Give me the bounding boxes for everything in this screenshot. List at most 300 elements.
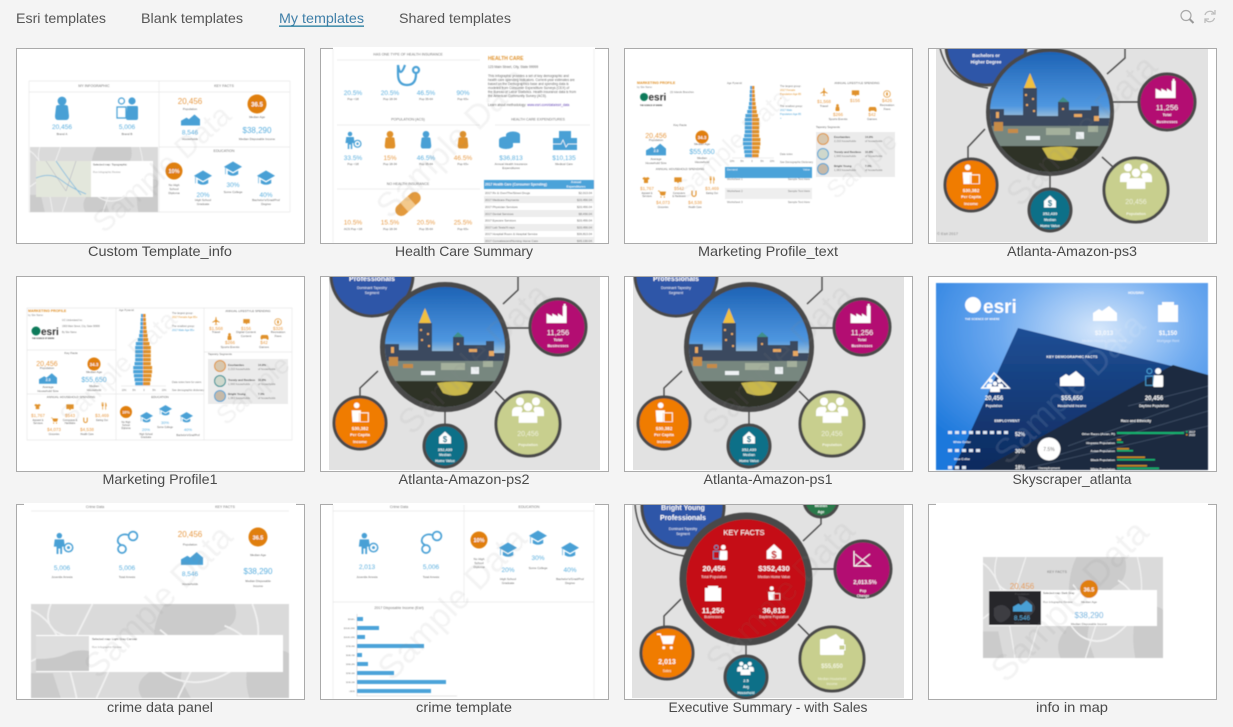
lifestyle icons: $156 (241, 326, 252, 331)
circle: median home value: Median (743, 453, 755, 457)
caption: crime data panel (107, 699, 213, 715)
badge: median age (248, 94, 266, 119)
badge: median age: 34.3 (698, 135, 707, 140)
employment stats: White Collar (953, 440, 972, 444)
chart: age pyramid: 5% (152, 390, 156, 392)
notes: pyramid: Population Age 85 (780, 92, 802, 96)
badge: median age: 34.3 (90, 362, 99, 367)
icon: bandage (393, 190, 423, 218)
stat: Brand B: 5,006 (119, 124, 136, 131)
chart: age pyramid: 5% (132, 390, 136, 392)
stat: population: Population (649, 138, 663, 142)
circle: median home value: Home Value (435, 459, 455, 463)
notes: pyramid: The smallest group: (780, 104, 803, 108)
stats row: insurance: Pop 65+ (457, 97, 469, 101)
circle: population: 20,456 (1125, 199, 1147, 206)
stat: disposable income: $38,290 (1075, 611, 1104, 620)
circle: total businesses: Total (858, 338, 866, 342)
chart: disposable income: $75K-99K (346, 646, 356, 648)
stat: juvenile arrests: Juvenile Arrests (51, 575, 73, 579)
icon: coins (499, 132, 520, 149)
stat: disposable income: $38,290 (244, 567, 273, 576)
stat: population (1010, 582, 1035, 596)
panel: tapestry segments: 1,640 households (834, 154, 857, 158)
icon: handcuffs (118, 532, 137, 553)
lifestyle icons: $266 (833, 112, 844, 117)
stats row: insurance: Pop 35-64 (419, 97, 433, 101)
table: sample rows: Worksheet 3 (727, 200, 743, 204)
heading: age pyramid: Age Pyramid (727, 81, 742, 85)
caps and stats: 40% (184, 427, 192, 432)
circle: median household income: $55,650 (821, 664, 844, 670)
circle: professionals (635, 234, 717, 316)
caps and stats: Some College (157, 426, 173, 429)
chart: age pyramid: 5% (740, 161, 744, 163)
spending icons: $543 (65, 413, 76, 418)
badge: median age: 36.5 (1084, 588, 1094, 594)
stats row: insurance: Pop 18-34 (383, 97, 397, 101)
badge: median age (1080, 580, 1098, 604)
circle: city skyline (986, 48, 1114, 176)
panel: tapestry segments: Bright Young (228, 392, 246, 396)
circle: per capita income (945, 159, 997, 211)
logo: esri: 1900 Main Street, City, State 99999 (62, 325, 100, 328)
watermark: Sample Data (987, 306, 1153, 472)
circle: population: 20,456 (517, 431, 539, 438)
panel: tapestry segments: 2,210 households (834, 139, 857, 143)
notes: pyramid: + (780, 97, 782, 100)
icon: household size: Household Size (645, 161, 667, 165)
watermark: Sample Data (391, 276, 557, 442)
lifestyle icons: Sports Events (829, 117, 848, 121)
panel: tapestry segments: 7.0% (865, 164, 872, 168)
map panel (983, 557, 1163, 658)
table: consumer spending: Annual (571, 180, 581, 184)
circle: professionals (331, 234, 413, 316)
map panel: Run Infographic Review (1043, 600, 1074, 604)
text block: health care intro: This infographic provides a set of key demographic and (488, 74, 569, 78)
stats row: insurance: 46.5% (417, 90, 435, 97)
circle: key facts: Median Home Value (758, 575, 790, 579)
table: consumer spending: 2017 Eyecare Services (485, 218, 516, 222)
stat: household income: $55,650 (1061, 396, 1084, 402)
badge: no high school: Diploma (168, 191, 180, 195)
table: sample rows: Value (803, 168, 810, 172)
icon and stat: bachelors (556, 542, 584, 585)
caps and stats: Bachelor's/Grad/Prof (176, 434, 200, 437)
badge: median age: Median Age (694, 142, 710, 146)
heading: key facts: Key Facts (64, 351, 78, 355)
watermark: Sample Data (982, 511, 1157, 690)
icon: refresh (1205, 10, 1215, 23)
circle: median household income: Income (826, 682, 838, 686)
chart: disposable income: $200K+ (348, 619, 356, 621)
spending icons: Apparel & (642, 192, 653, 195)
card: Marketing Profile_text (624, 48, 912, 259)
logo: esri: By Site Name (62, 331, 77, 334)
card: info in map (928, 503, 1216, 715)
heading: lifestyle spending: ANNUAL LIFESTYLE SPENDING (225, 309, 271, 313)
notes: pyramid: The largest group: (780, 84, 801, 88)
stat: mortgage: $1,150 (1159, 331, 1178, 337)
caption: info in map (1036, 699, 1108, 715)
text block: health care intro: the Bureau of Labor Statistics. Health insurance data is from (488, 90, 576, 94)
chart: age pyramid: 10% (122, 390, 126, 392)
icon and stat: bachelors: Bachelor's/Grad/Prof (556, 577, 584, 581)
stat: households: Households (1014, 621, 1030, 625)
circle: per capita income: Per Capita (350, 432, 371, 437)
notes: pyramid: The smallest group: (172, 324, 195, 328)
stats: expenditures: Expenditures (502, 166, 520, 170)
card: Custom Template_info (16, 48, 304, 259)
table: consumer spending: $20,456.04 (577, 198, 592, 202)
caption: Skyscraper_atlanta (1012, 471, 1132, 487)
icon and stat: high school: Graduate (197, 202, 210, 206)
lifestyle icons: Fees (884, 107, 891, 111)
icon and stat: high school: High School (500, 577, 516, 581)
heading: has one type: HAS ONE TYPE OF HEALTH INSURANCE (373, 52, 443, 56)
stat: population: 20,456 (985, 396, 1004, 402)
lifestyle icons: Recreation (271, 330, 286, 334)
map panel (31, 604, 289, 698)
circle: median household income (800, 627, 864, 691)
badge: no high school: No High (474, 557, 485, 561)
panel: tapestry segments: Exurbanites (228, 363, 244, 367)
stat: households (182, 130, 199, 141)
stats: expenditures: $10,135 (552, 155, 576, 162)
spending icons (31, 402, 109, 436)
icon and stat: bachelors (252, 170, 280, 206)
tab: My templates active: My templates (279, 10, 364, 26)
watermark: Sample Data (87, 98, 238, 239)
badge: no high school (120, 406, 132, 430)
stat: households: 8,546 (1014, 615, 1031, 622)
panel: tapestry segments: Tapestry Segments (816, 125, 841, 129)
stat: juvenile arrests (51, 565, 73, 579)
circle: population (800, 392, 864, 456)
badge: median age: 36.5 (253, 536, 263, 542)
stats row: insurance (344, 90, 470, 101)
lifestyle icons: Travel (212, 330, 220, 334)
header: marketing profile: MARKETING PROFILE (637, 81, 676, 85)
spending icons: $3,469 (95, 413, 109, 418)
icon: person (55, 97, 69, 120)
panel: tapestry segments: 1,640 households (228, 382, 251, 386)
heading: education: EDUCATION (151, 395, 169, 399)
watermark: Sample Data (698, 512, 862, 680)
table: consumer spending (484, 180, 594, 244)
logo: esri: THE SCIENCE OF WHERE (32, 338, 55, 340)
icon and stat: some college (529, 530, 548, 570)
icon: household size: 2.3 (46, 378, 50, 382)
icon: household size: Average (42, 385, 54, 389)
caption: Executive Summary - with Sales (668, 699, 868, 715)
panel: tapestry segments: Tapestry Segments (208, 352, 233, 356)
lifestyle icons (817, 88, 895, 121)
panel: tapestry segments: 1,063 households (834, 168, 857, 172)
icon and stat: high school: Graduate (502, 581, 515, 585)
spending icons (640, 176, 719, 209)
circle: total businesses: 11,256 (1156, 103, 1178, 112)
card: Atlanta-Amazon-ps3 (928, 5, 1216, 259)
map panel: Run Infographic Review (92, 645, 123, 649)
table: sample rows: Sample Text Here (788, 189, 810, 193)
chart: race and ethnicity: Hispanic Population (1086, 441, 1115, 445)
heading: no insurance: NO HEALTH INSURANCE (387, 182, 430, 186)
circle: key facts: 20,456 (703, 564, 725, 573)
badge: no high school: 10% (122, 410, 130, 414)
badge: no high school (166, 162, 182, 195)
circle: population: Population (1126, 212, 1146, 216)
notes: pyramid: 2017 Male Age 85+ (172, 328, 195, 332)
icon: handcuffs (422, 532, 441, 553)
watermark: Sample Data (671, 84, 794, 204)
badge: unemployment: 7.5% (1043, 447, 1055, 453)
circle: total businesses (834, 299, 890, 355)
stat: juvenile arrests: 2,013 (359, 564, 376, 571)
table: sample rows: Sample Text Here (788, 200, 810, 204)
circle: avg household: Avg (743, 685, 749, 689)
caption: Marketing Profile_text (698, 243, 838, 259)
caps and stats: High School (139, 433, 153, 436)
badge: unemployment (1038, 438, 1060, 470)
stat: disposable income (239, 126, 275, 141)
lifestyle icons: Recreation (880, 103, 895, 107)
circle: pop growth: Change (857, 594, 869, 598)
badge: median age: Median Age (249, 115, 265, 119)
watermark: Sample Data (999, 48, 1165, 214)
circle: per capita income: $30,382 (963, 188, 980, 193)
panel: tapestry segments: 10.8% (258, 378, 266, 382)
circle: key facts (683, 516, 809, 642)
icon and stat: some college: 30% (531, 555, 545, 562)
icon and stat: bachelors: Degree (261, 202, 271, 206)
circle: total businesses: Businesses (1156, 120, 1178, 124)
icon: house (181, 552, 203, 565)
badge: no high school: 10% (168, 169, 180, 175)
table: consumer spending: 2017 Health Care (Consumer Spending) (485, 182, 547, 186)
circle: per capita income: Income (353, 439, 368, 444)
stat: population: 20,456 (645, 133, 667, 140)
table: sample rows: Worksheet 1 (727, 177, 743, 181)
tab: Esri templates: Esri templates (16, 10, 106, 26)
table: consumer spending: $20,456.04 (577, 205, 592, 209)
text block: health care intro: based on the Demographics base and spending data is (488, 82, 569, 86)
stat: disposable income: $38,290 (243, 126, 272, 135)
stat: juvenile arrests: 5,006 (54, 565, 71, 572)
stats: expenditures: Annual Health Insurance (495, 162, 528, 166)
chart: race and ethnicity: 2022 (1189, 433, 1196, 437)
circle: professionals: Professionals (349, 276, 395, 283)
card: Marketing Profile1 (16, 276, 304, 487)
spending icons: Services (33, 422, 44, 425)
chart: race and ethnicity (1082, 419, 1196, 471)
badge: no high school: 10% (473, 538, 485, 544)
logo: esri (965, 297, 1017, 321)
employment stats: 30% (1015, 449, 1026, 455)
circle: key facts: 36,813 (763, 606, 785, 615)
logo: esri: THE SCIENCE OF WHERE (640, 105, 663, 107)
circle: median home value: $ (1048, 199, 1053, 208)
stat: disposable income: Income (253, 584, 263, 588)
circle: total businesses (530, 299, 586, 355)
spending icons: $4,073 (656, 200, 670, 205)
stats row: no insurance: 25.5% (454, 220, 472, 226)
spending icons: Groceries (658, 206, 669, 209)
table: consumer spending: $35,130.04 (577, 239, 592, 243)
stat: Brand A (52, 124, 72, 136)
table: consumer spending: 2017 Rx & Over/The/Street Drugs (485, 191, 531, 195)
heading: employment: EMPLOYMENT (994, 419, 1020, 423)
table: sample rows (725, 167, 812, 204)
stat: households: 8,546 (182, 130, 199, 136)
map panel: Run Infographic Review (93, 170, 121, 174)
chart: age pyramid: 10% (162, 390, 166, 392)
stats row: insurance: 20.5% (381, 90, 399, 97)
badge: no high school: Diploma (473, 565, 485, 569)
stat: household income: Median (89, 384, 99, 388)
icon and stat: bachelors: 40% (259, 192, 273, 199)
spending icons: $3,469 (705, 186, 719, 191)
notes: pyramid: 2017 Female Age 85+ (172, 315, 198, 319)
panel: tapestry segments: 7.0% (258, 392, 265, 396)
heading: my infographic: MY INFOGRAPHIC (78, 84, 110, 88)
circle: median home value: Median (439, 453, 451, 457)
chart: age pyramid: 0 (143, 390, 145, 392)
panel: tapestry segments: Exurbanites (834, 135, 850, 139)
connector lines (334, 276, 532, 426)
heading: key facts: KEY FACTS (1047, 570, 1067, 574)
stats row: population: Pop <18 (347, 162, 359, 166)
heading: key facts: KEY FACTS (215, 505, 235, 509)
icon: household size: 2.3 (654, 149, 658, 153)
chart: disposable income: $150K-199K (344, 628, 356, 630)
circle: median age: Median (815, 504, 827, 508)
circle: median home value: 352,430 (1043, 211, 1058, 216)
notes: pyramid: + (780, 117, 782, 120)
icon: household size (645, 144, 667, 165)
stat: households: Households (182, 582, 198, 586)
lifestyle icons: $426 (882, 98, 893, 103)
circle: professionals: Dominant Tapestry (661, 286, 691, 290)
circle: population (1104, 158, 1168, 222)
card: Health Care Summary (320, 47, 608, 259)
lifestyle icons: Content (241, 334, 251, 338)
watermark: second: Sample (210, 349, 296, 430)
spending icons: Eating Out (96, 419, 108, 422)
circle: total businesses: 11,256 (851, 328, 873, 337)
circle: sales: Sales (663, 669, 672, 673)
spending icons: $542 (674, 186, 685, 191)
stat: population: 20,456 (178, 97, 203, 106)
lifestyle icons (209, 317, 286, 349)
table: consumer spending: 2017 Dental Services (485, 212, 514, 216)
stat: household income: Household (87, 388, 102, 392)
circle: median household income: Median Household (818, 677, 846, 681)
connector lines (940, 48, 1140, 190)
stat: disposable income: Median Disposable Income (239, 137, 275, 141)
notes: pyramid (172, 311, 205, 392)
circle: median home value: $ (443, 435, 448, 444)
stat: disposable income (244, 567, 273, 588)
panel: tapestry segments: of households (865, 154, 883, 158)
chart: age pyramid (121, 314, 166, 392)
icon: stethoscope (398, 65, 419, 85)
notes: pyramid: Population Age 85 (780, 112, 802, 116)
stat: population: Population (1015, 592, 1029, 596)
circle: median home value: $ (747, 435, 752, 444)
table: consumer spending: $20,456.04 (577, 226, 592, 230)
panel: tapestry segments: 14.9% (865, 135, 873, 139)
stats row: no insurance: 20.5% (417, 220, 435, 226)
lifestyle icons: $266 (225, 340, 236, 345)
caps and stats: 30% (161, 420, 169, 425)
table: consumer spending: 2017 Hospital Room & Hospital Service (485, 232, 538, 236)
table: consumer spending: Expenditures (566, 184, 586, 188)
circle: per capita income: $30,382 (352, 426, 369, 431)
heading: age pyramid: Age Pyramid (119, 308, 134, 312)
circle: population: 20,456 (821, 431, 843, 438)
notes: pyramid: The largest group: (172, 311, 193, 315)
notes: pyramid: See Demographic Dictionary (780, 160, 814, 164)
chart: disposable income (344, 606, 457, 696)
caption: Atlanta-Amazon-ps1 (704, 471, 833, 487)
stats row: population: 46.5% (417, 155, 435, 162)
logo: esri: esri (983, 297, 1017, 318)
heading: education: EDUCATION (519, 505, 540, 509)
watermark: second: Sample (821, 127, 903, 204)
stats row: no insurance: Pop 18-34 (383, 227, 397, 231)
badge: median age: Median Age (1081, 600, 1097, 604)
heading: key facts: Key Facts (673, 123, 687, 127)
panel: tapestry segments: of households (865, 168, 883, 172)
stats row: insurance: 20.5% (344, 90, 362, 97)
icon and stat: high school: 20% (501, 567, 515, 574)
panel: tapestry segments: 10.8% (865, 150, 873, 154)
logo: esri: esri (648, 92, 667, 104)
stats row: no insurance: ACS Pop <18 (344, 227, 362, 231)
badge: median age: 36.5 (251, 102, 263, 108)
stat: juvenile arrests: Juvenile Arrests (356, 575, 378, 579)
icon: house (181, 114, 200, 126)
heading: household spending: ANNUAL HOUSEHOLD SPENDING (656, 167, 705, 171)
notes: pyramid (780, 84, 814, 164)
icon: household size: Household Size (37, 389, 59, 393)
spending icons: Computers (673, 192, 686, 195)
chart: disposable income: $100K-149K (344, 637, 356, 639)
chart: age pyramid: 5% (760, 161, 764, 163)
watermark: Sample Data (76, 518, 240, 686)
circle: bright young professionals (642, 466, 724, 548)
chart: disposable income: <$15K (349, 690, 356, 693)
chart: race and ethnicity: 2017 (1189, 430, 1196, 434)
circle: avg household: 2.5 (743, 678, 750, 683)
circle: sales: 2,013 (658, 659, 676, 666)
table: consumer spending: 2017 Physician Services (485, 205, 518, 209)
stat: population (178, 530, 203, 546)
logo: esri: (0) Islands Branches (670, 90, 694, 94)
heading: key demographic facts: KEY DEMOGRAPHIC FACTS (1046, 355, 1098, 359)
tabs navigation (16, 10, 511, 27)
panel: tapestry segments: Bright Young (834, 164, 852, 168)
spending icons: Computers & (63, 419, 78, 422)
circle: key facts: $ (771, 550, 777, 561)
caps and stats (139, 405, 200, 439)
heading: expenditures: HEALTH CARE EXPENDITURES (511, 118, 566, 122)
spending icons: $4,073 (47, 427, 61, 432)
icon: household size (37, 373, 59, 393)
circle: median home value: Home Value (739, 459, 759, 463)
